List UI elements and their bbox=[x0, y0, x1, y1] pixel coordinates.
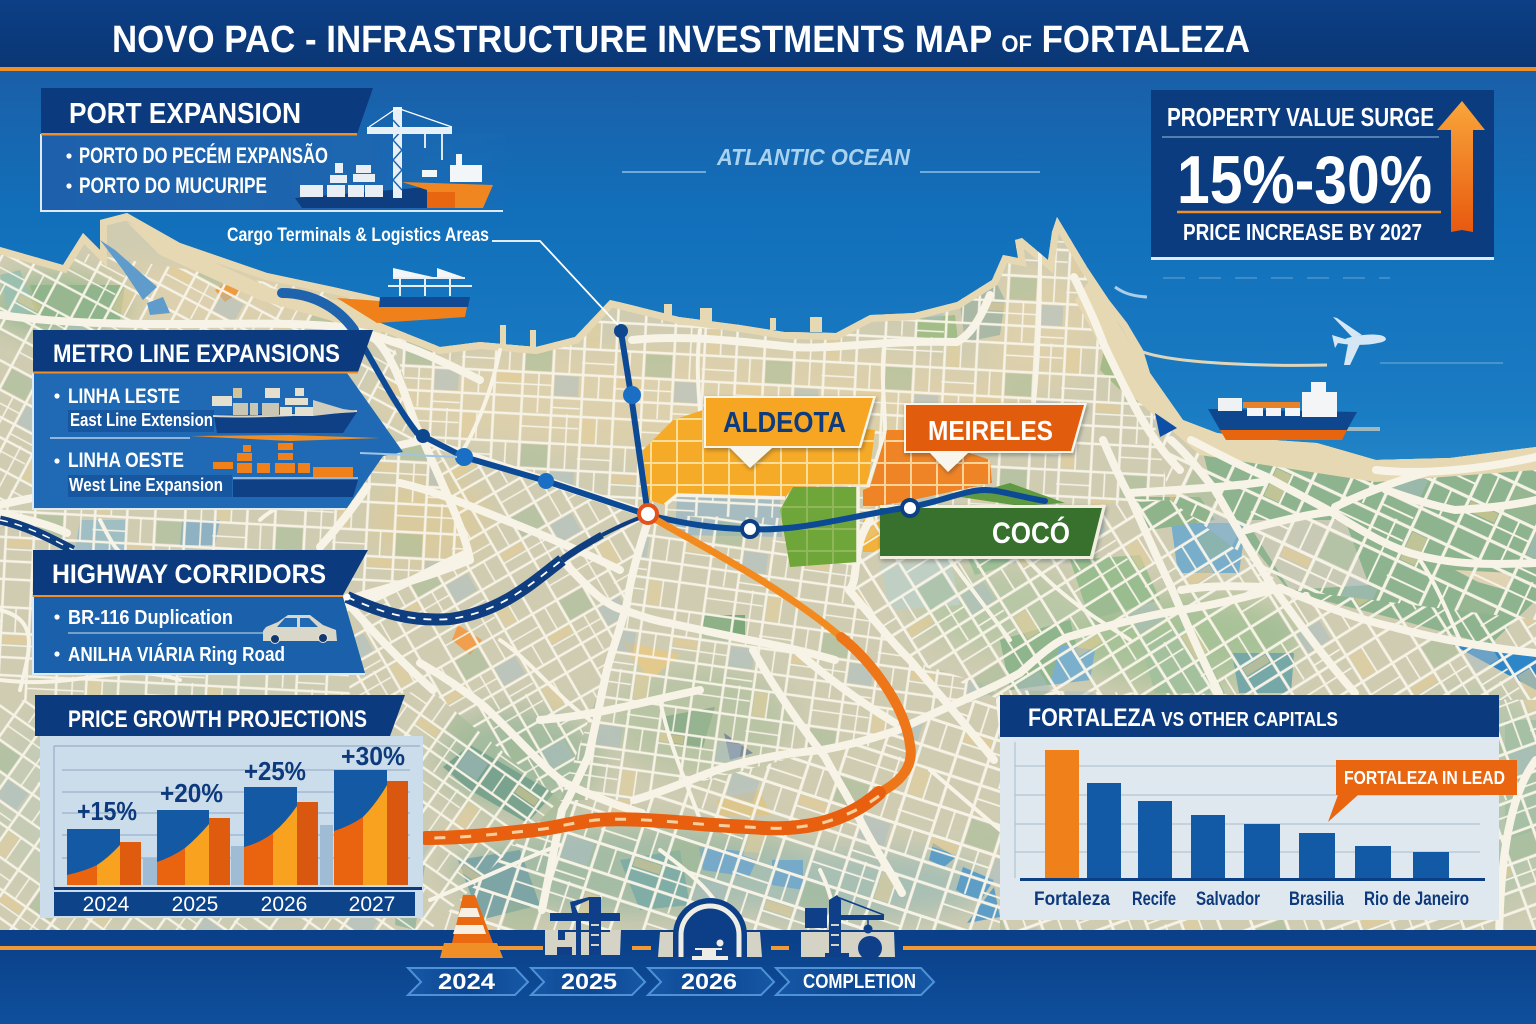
port list bbox=[66, 143, 328, 198]
green river strip bbox=[960, 483, 1065, 506]
ocean wave marks bbox=[1115, 278, 1503, 429]
value labels: +25% bbox=[244, 756, 306, 786]
icon: ship near cargo terminals bbox=[337, 268, 472, 323]
metro list: West Line Expansion bbox=[69, 475, 223, 495]
title: NOVO PAC - INFRASTRUCTURE INVESTMENTS MAP OF FORTALEZA bbox=[112, 19, 1250, 61]
icon: car bbox=[263, 615, 337, 644]
value labels: +15% bbox=[77, 796, 137, 826]
panel: price growth projections bbox=[35, 695, 423, 918]
metro list bbox=[50, 385, 232, 497]
icon: container ship west line bbox=[213, 443, 358, 497]
axis labels: Rio de Janeiro bbox=[1364, 889, 1469, 910]
step completion: COMPLETION bbox=[803, 971, 916, 993]
city map bbox=[0, 210, 1536, 940]
icon: airplane bbox=[1332, 317, 1386, 365]
axis labels: Brasilia bbox=[1289, 889, 1344, 910]
map colour blocks bbox=[0, 270, 1536, 930]
callout: Fortaleza in lead bbox=[1328, 760, 1517, 822]
main roads bbox=[0, 250, 1536, 940]
step 2024 bbox=[408, 968, 528, 995]
street grid over districts bbox=[643, 410, 992, 567]
route: highway corridor bbox=[0, 515, 648, 620]
icon: crane 2025 bbox=[545, 897, 621, 955]
axis years bbox=[54, 887, 422, 916]
ocean label: ATLANTIC OCEAN bbox=[716, 144, 910, 170]
neighborhood: Aldeota district bbox=[643, 410, 875, 505]
value labels: +30% bbox=[341, 741, 405, 771]
label: Aldeota: ALDEOTA bbox=[723, 407, 846, 439]
icon: tunnel arch bbox=[658, 898, 762, 960]
panel: property value surge: PROPERTY VALUE SURGE bbox=[1167, 102, 1434, 132]
step 2026: 2026 bbox=[681, 969, 737, 994]
heading: port expansion: PORT EXPANSION bbox=[69, 98, 301, 130]
axis labels: Fortaleza bbox=[1034, 889, 1110, 910]
route: orange extension bbox=[426, 515, 911, 838]
callout: cargo terminals: Cargo Terminals & Logistics Areas bbox=[227, 225, 489, 246]
icon: rising arrow bbox=[1437, 101, 1485, 232]
value labels: +20% bbox=[160, 778, 223, 808]
inlet water bbox=[100, 240, 170, 315]
step completion bbox=[776, 968, 934, 995]
step 2025 bbox=[531, 968, 645, 995]
big stat: 15%-30% bbox=[1177, 142, 1432, 218]
metro list: LINHA OESTE bbox=[68, 449, 184, 472]
highway list: ANILHA VIÁRIA Ring Road bbox=[68, 643, 285, 666]
step 2026 bbox=[648, 968, 774, 995]
bars 2026 bbox=[244, 787, 318, 885]
metro list: LINHA LESTE bbox=[68, 385, 180, 408]
step 2024: 2024 bbox=[438, 969, 496, 994]
panel: metro line expansions bbox=[33, 330, 457, 509]
panel: port expansion bbox=[41, 88, 505, 211]
callout: Fortaleza in lead: FORTALEZA IN LEAD bbox=[1344, 768, 1505, 788]
highway list bbox=[54, 607, 285, 666]
icon: crane and cargo ship bbox=[295, 107, 493, 208]
heading: metro line expansions bbox=[33, 330, 373, 374]
metro stations bbox=[416, 324, 918, 537]
bars 2025 bbox=[157, 810, 230, 885]
label: Meireles bbox=[904, 403, 1087, 472]
icon: traffic cone bbox=[440, 895, 503, 958]
heading: Fortaleza vs other capitals bbox=[1000, 695, 1499, 737]
neighborhood: Meireles district bbox=[863, 430, 992, 508]
step 2025: 2025 bbox=[561, 969, 617, 994]
label: Cocó bbox=[880, 505, 1106, 559]
metro list: East Line Extension bbox=[70, 410, 213, 430]
timeline chevrons bbox=[408, 968, 934, 995]
axis labels: Salvador bbox=[1196, 889, 1260, 910]
ocean background bbox=[0, 70, 1536, 500]
header banner bbox=[0, 0, 1536, 71]
panel: Fortaleza vs other capitals bbox=[1000, 695, 1517, 920]
bars 2024 bbox=[67, 829, 141, 885]
axis labels: Recife bbox=[1132, 889, 1176, 910]
highway list: BR-116 Duplication bbox=[68, 607, 233, 629]
label: Cocó: COCÓ bbox=[992, 516, 1070, 550]
axis years: 2027 bbox=[349, 893, 395, 916]
heading: price growth projections bbox=[35, 695, 405, 736]
bar chart: capitals bbox=[1015, 742, 1485, 910]
axis years: 2025 bbox=[172, 893, 218, 916]
route: metro east-west line bbox=[282, 293, 1045, 529]
beach strip bbox=[0, 213, 1536, 482]
footer band bbox=[0, 930, 1536, 1024]
label: Meireles: MEIRELES bbox=[928, 415, 1053, 446]
panel: property value surge bbox=[1151, 90, 1494, 260]
highway start dot bbox=[344, 594, 350, 600]
port list: PORTO DO PECÉM EXPANSÃO bbox=[79, 143, 328, 168]
panel: highway corridors bbox=[33, 550, 368, 674]
heading: Fortaleza vs other capitals: FORTALEZA VS OTHER CAPITALS bbox=[1028, 704, 1338, 732]
axis years: 2026 bbox=[261, 893, 307, 916]
neighborhood: Cocó park bbox=[780, 487, 858, 567]
heading: highway corridors: HIGHWAY CORRIDORS bbox=[52, 559, 326, 589]
icon: crane completion bbox=[801, 895, 895, 960]
bar chart: price growth bbox=[54, 741, 422, 916]
callout: cargo terminals bbox=[227, 225, 618, 325]
heading: port expansion bbox=[41, 88, 373, 136]
axis labels bbox=[1034, 889, 1469, 910]
street grid bbox=[0, 210, 1536, 940]
heading: price growth projections: PRICE GROWTH PROJECTIONS bbox=[68, 706, 367, 733]
label: Aldeota bbox=[704, 396, 876, 468]
icon: small pointer bbox=[1155, 413, 1177, 437]
icon: container ship east line bbox=[190, 388, 380, 441]
heading: highway corridors bbox=[33, 550, 368, 597]
port list: PORTO DO MUCURIPE bbox=[79, 173, 267, 198]
bars 2027 bbox=[334, 770, 408, 885]
value labels bbox=[77, 741, 405, 826]
icon: ship in bay bbox=[1208, 382, 1357, 440]
heading: metro line expansions: METRO LINE EXPANSIONS bbox=[53, 340, 340, 368]
axis years: 2024 bbox=[83, 893, 130, 916]
panel: property value surge: PRICE INCREASE BY 2027 bbox=[1183, 219, 1422, 245]
